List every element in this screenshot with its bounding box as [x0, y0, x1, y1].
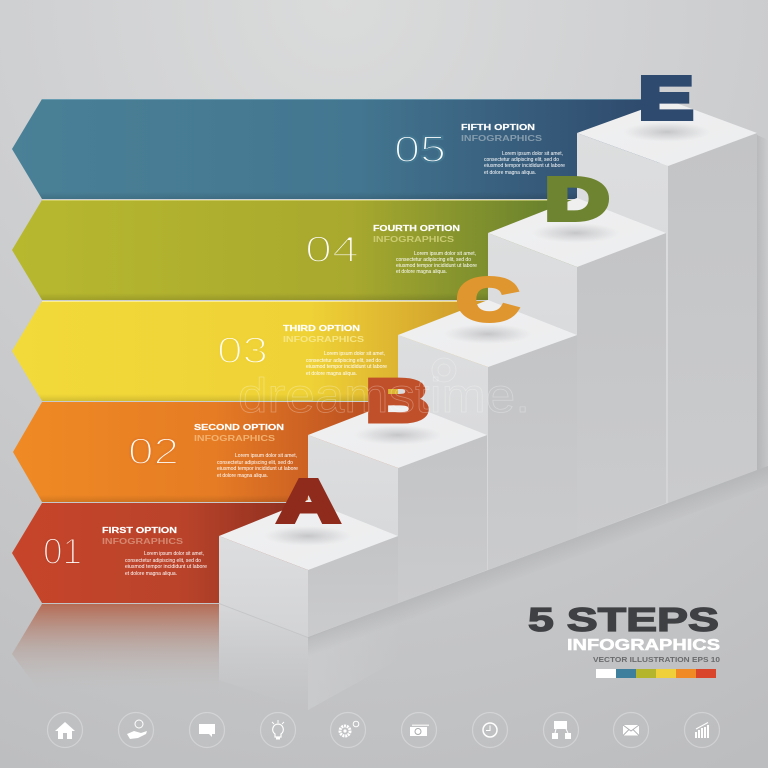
text block: third option: eiusmod tempor incididunt ut labore: [306, 364, 387, 370]
text block: first option: FIRST OPTION: [102, 525, 177, 535]
text block: fifth option: et dolore magna aliqua.: [484, 170, 536, 176]
banner: first option: [12, 503, 310, 603]
step A block: [219, 500, 398, 637]
step B block: [308, 400, 487, 637]
icon: envelope: [614, 712, 648, 748]
icon: light bulb: [260, 712, 296, 748]
caption: vector illustration: VECTOR ILLUSTRATION EPS 10: [593, 655, 720, 664]
text block: third option: et dolore magna aliqua.: [306, 371, 357, 377]
text block: first option: [102, 525, 207, 577]
text block: fourth option: et dolore magna aliqua.: [396, 269, 447, 275]
text block: second option: consectetur adipiscing elit, sed do: [217, 460, 293, 466]
banner: second option: [13, 402, 410, 502]
icon: clock: [472, 712, 508, 748]
number 04: 04: [305, 229, 359, 270]
text block: fifth option: [461, 122, 565, 176]
text block: fourth option: INFOGRAPHICS: [373, 234, 454, 244]
text block: fourth option: eiusmod tempor incididunt ut labore: [396, 263, 477, 269]
text block: fourth option: [373, 223, 477, 275]
title: 5 steps: 5 STEPS: [528, 602, 719, 639]
letter A: A: [278, 468, 339, 534]
number 01: 01: [43, 531, 82, 572]
watermark: dreamstime.: [238, 370, 530, 423]
step E block: [577, 100, 757, 537]
number 05: 05: [394, 129, 446, 170]
text block: second option: SECOND OPTION: [194, 422, 284, 432]
text block: fifth option: INFOGRAPHICS: [461, 133, 542, 143]
text block: third option: consectetur adipiscing elit, sed do: [306, 358, 381, 364]
text block: second option: Lorem ipsum dolor sit amet,: [235, 453, 297, 459]
icon: growth bar chart: [684, 712, 720, 748]
step D block: [488, 198, 666, 570]
text block: third option: [283, 323, 387, 377]
text block: first option: INFOGRAPHICS: [102, 536, 183, 546]
shadow under letter E: [623, 122, 711, 142]
icon: gears: [330, 712, 366, 748]
shadow under letter B: [354, 425, 442, 445]
text block: fifth option: FIFTH OPTION: [461, 122, 535, 132]
banner: third option: [12, 301, 500, 401]
icon: hand with coin: [118, 712, 154, 748]
text block: second option: INFOGRAPHICS: [194, 433, 275, 443]
text block: third option: Lorem ipsum dolor sit amet,: [324, 351, 385, 357]
text block: fourth option: consectetur adipiscing elit, sed do: [396, 257, 471, 263]
text block: first option: et dolore magna aliqua.: [125, 571, 177, 577]
text block: fourth option: FOURTH OPTION: [373, 223, 460, 233]
number 02: 02: [128, 431, 179, 472]
text block: fifth option: Lorem ipsum dolor sit amet,: [502, 151, 563, 157]
text block: first option: consectetur adipiscing elit, sed do: [125, 558, 201, 564]
text block: third option: THIRD OPTION: [283, 323, 360, 333]
colour legend strip: [596, 669, 716, 678]
number 03: 03: [217, 330, 268, 371]
letter C: C: [457, 267, 518, 333]
banner: fifth option: [12, 99, 660, 199]
text block: fourth option: Lorem ipsum dolor sit amet,: [414, 251, 476, 257]
text block: fifth option: eiusmod tempor incididunt ut labore: [484, 163, 565, 169]
shadow under letter D: [532, 223, 620, 243]
shadow under letter C: [444, 324, 532, 344]
step C block: [398, 300, 577, 603]
text block: third option: INFOGRAPHICS: [283, 334, 364, 344]
subtitle: infographics: INFOGRAPHICS: [567, 637, 720, 654]
icon: speech bubble: [190, 712, 224, 748]
icon: home: [48, 712, 82, 748]
text block: second option: et dolore magna aliqua.: [217, 473, 268, 479]
icon: banknote: [402, 712, 436, 748]
text block: fifth option: consectetur adipiscing elit, sed do: [484, 157, 559, 163]
text block: first option: Lorem ipsum dolor sit amet,: [144, 551, 204, 557]
banner: fourth option: [12, 200, 590, 300]
text block: second option: eiusmod tempor incididunt ut labore: [217, 466, 298, 472]
shadow under letter A: [264, 526, 352, 546]
letter E: E: [639, 66, 693, 132]
letter D: D: [545, 166, 609, 232]
letter B: B: [366, 368, 429, 434]
reflection of first banner: [12, 604, 219, 695]
reflection of first step: [219, 604, 398, 710]
icon: hierarchy chart: [544, 712, 578, 748]
text block: first option: eiusmod tempor incididunt ut labore: [125, 564, 207, 570]
text block: second option: [194, 422, 298, 479]
staircase ground shadow: [308, 466, 768, 657]
staircase edge shadow: [757, 135, 768, 470]
